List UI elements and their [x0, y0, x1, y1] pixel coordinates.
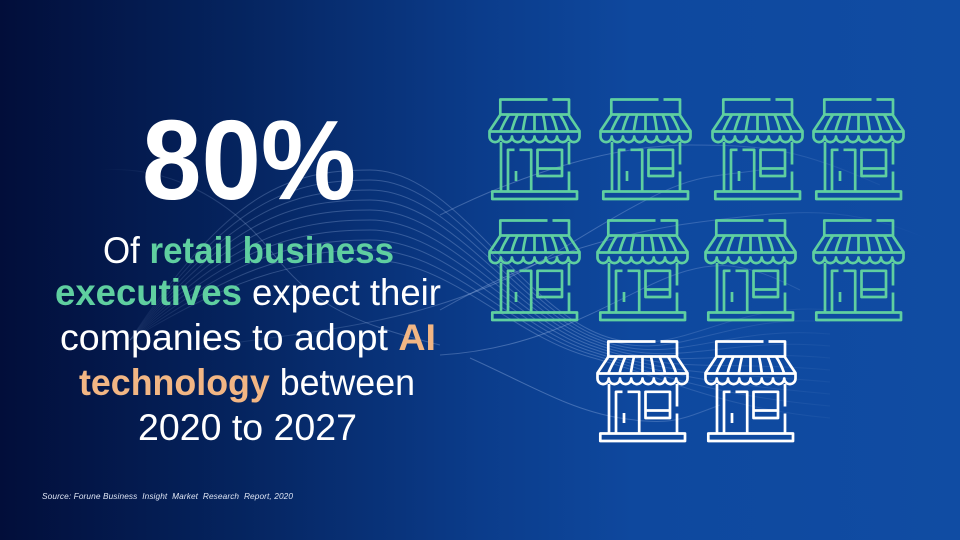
text block: description: Of retail business [103, 230, 394, 271]
text block: description: technology between [79, 362, 415, 403]
icon: store row 3 highlighted [598, 342, 796, 441]
icon: store row 1 [490, 100, 904, 199]
text block: description: 2020 to 2027 [138, 407, 357, 448]
wave line pattern [100, 145, 930, 422]
icon grid: stores [490, 100, 904, 441]
icon: store row 2 [490, 220, 904, 320]
source note: Source: Forune Business Insight Market Research Report, 2020 [42, 491, 293, 501]
heading: 80%: 80% [142, 97, 356, 223]
text block: description: executives expect their [55, 272, 441, 313]
text block: description [55, 230, 441, 448]
text block: description: companies to adopt AI [60, 317, 436, 358]
